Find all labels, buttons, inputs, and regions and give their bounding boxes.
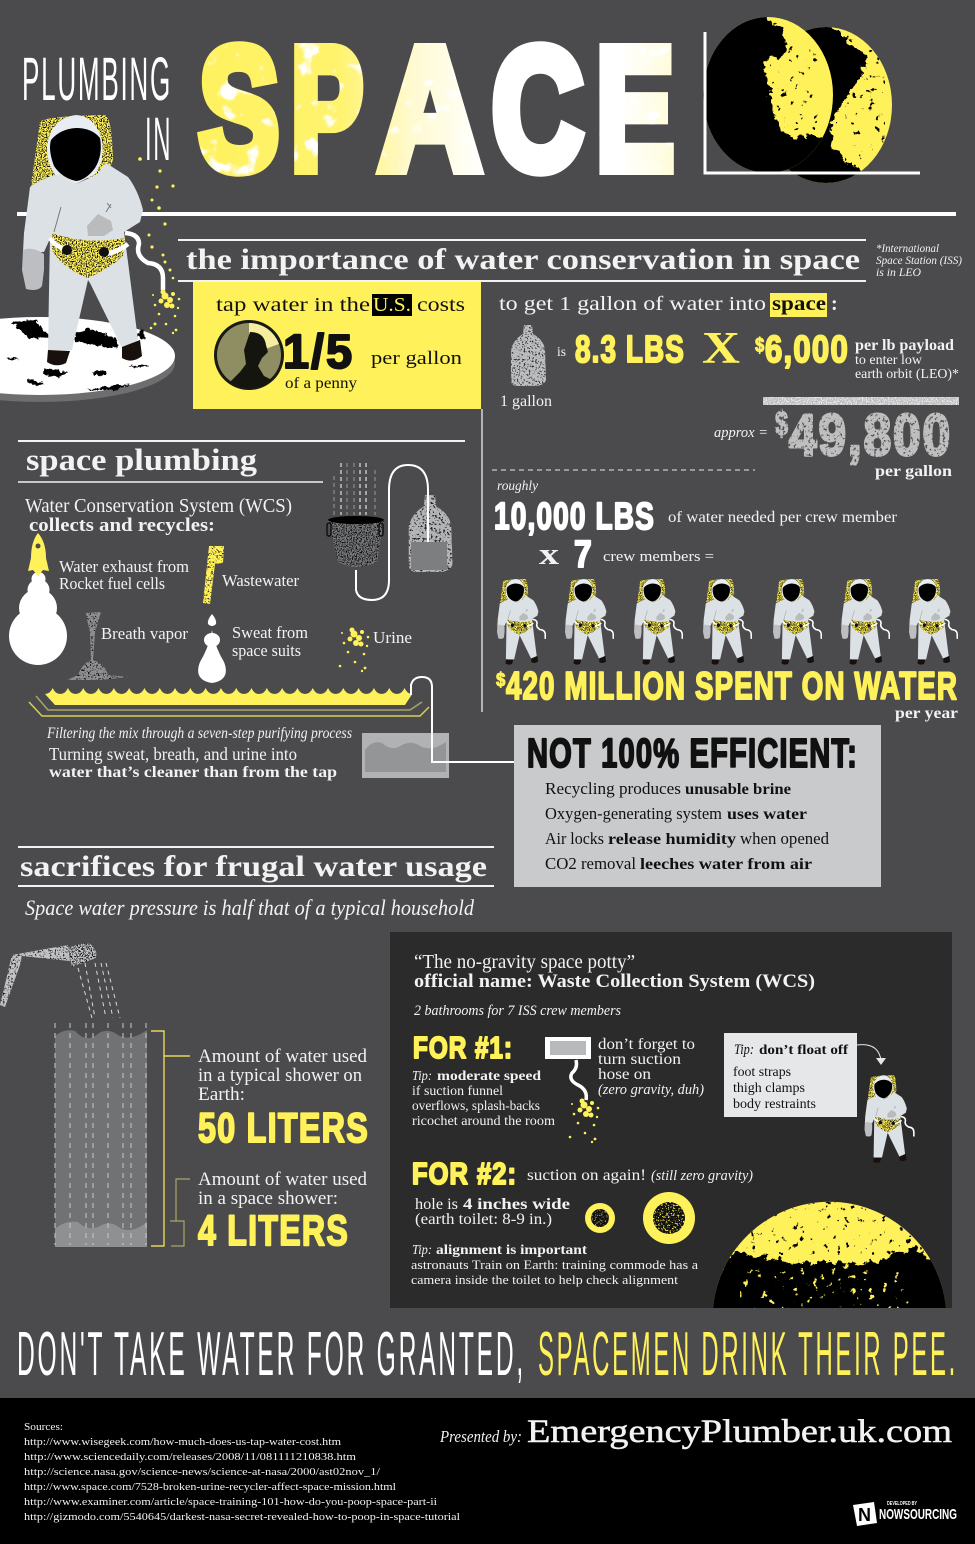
callout: don't float off: body restraints <box>733 1096 816 1111</box>
text: water pressure: Space water pressure is half that of a typical household <box>25 895 475 920</box>
text: turn suction on <box>598 1036 704 1098</box>
text: hole size: (earth toilet: 8-9 in.) <box>415 1211 552 1228</box>
icon: gallon jug <box>511 325 546 386</box>
text: alignment tip <box>411 1242 698 1287</box>
title: space: E <box>596 12 674 206</box>
label: sweat from space suits: space suits <box>232 641 301 660</box>
bracket: 4 liters <box>170 1179 190 1246</box>
icon: suction hose <box>545 1037 599 1143</box>
heading: 1 gallon into space: to get 1 gallon of water into <box>499 293 766 315</box>
text: cleaner than tap <box>49 744 337 781</box>
label: sweat from space suits <box>232 623 308 660</box>
icon: bucket and hose to jug <box>327 463 452 600</box>
sources list: http://science.nasa.gov/science-news/science-at-nasa/2000/ast02nov_1/ <box>24 1466 381 1478</box>
label: filtering process: Filtering the mix through a seven-step purifying process <box>46 725 352 742</box>
panel: not 100% efficient: Air locks <box>545 829 604 848</box>
panel: tap water cost: tap water in the <box>216 294 370 316</box>
text: WCS intro: Water Conservation System (WCS) <box>25 495 292 517</box>
footer panel <box>0 1398 975 1544</box>
text: potty title <box>414 952 815 1019</box>
text: hole size: hole is <box>415 1196 458 1213</box>
panel: tap water cost: U.S. <box>373 294 411 316</box>
icon: small hole <box>585 1203 615 1233</box>
text: potty title: 2 bathrooms for 7 ISS crew members <box>414 1003 621 1019</box>
multiply sign: X <box>702 323 740 373</box>
text: water needed: of water needed per crew member <box>668 509 898 526</box>
text: is: is <box>557 345 566 360</box>
icon: shower head <box>0 944 120 1018</box>
text: alignment tip: Tip: <box>412 1243 432 1258</box>
footnote: ISS: Space Station (ISS) <box>876 253 962 267</box>
heading: 1 gallon into space: : <box>831 293 838 315</box>
panel: tap water cost: 1/5 <box>283 326 354 379</box>
icon: sweat drops <box>198 614 226 683</box>
text: turn suction on: turn suction <box>598 1051 681 1068</box>
heading: sacrifices: sacrifices for frugal water usage <box>20 850 487 883</box>
heading: space plumbing: space plumbing <box>26 442 258 477</box>
text: IN <box>145 105 172 173</box>
stat: 50 liters: 50 LITERS <box>198 1104 369 1151</box>
footnote: ISS: *International <box>876 241 940 255</box>
callout: don't float off: don’t float off <box>759 1043 848 1058</box>
divider: dashed <box>492 469 755 471</box>
icon: urine drops <box>339 628 369 672</box>
stat: 6000 dollars: 6,000 <box>765 329 849 371</box>
panel: tap water cost <box>193 282 481 409</box>
text: alignment tip: camera inside the toilet to help check alignment <box>411 1272 678 1287</box>
text: suction on again: suction on again! <box>527 1167 646 1184</box>
logo: nowsourcing <box>853 1501 957 1526</box>
panel: space potty <box>390 932 960 1330</box>
divider: main rule <box>17 212 956 216</box>
sources list <box>24 1421 460 1523</box>
text: approx: approx = <box>714 425 768 441</box>
icon: wastewater <box>203 546 224 604</box>
label: sweat from space suits: Sweat from <box>232 623 308 642</box>
text: suction on again: (still zero gravity) <box>651 1168 753 1184</box>
divider: vertical column rule <box>481 409 483 712</box>
logo: nowsourcing: N <box>858 1505 871 1525</box>
text: per lb payload <box>855 337 959 382</box>
sources list: http://www.sciencedaily.com/releases/2008/11/081111210838.htm <box>24 1451 357 1463</box>
text: typical shower: Amount of water used <box>198 1046 367 1067</box>
text: space shower <box>198 1169 367 1209</box>
label: rocket fuel cells: Rocket fuel cells <box>59 574 165 593</box>
text: hole size <box>415 1196 570 1228</box>
arrow: to astronaut <box>857 1045 886 1065</box>
astronaut row: seven crew <box>497 579 957 665</box>
chart: water tank comparison <box>55 1023 147 1247</box>
panel: tap water cost: of a penny <box>285 375 357 392</box>
moon ground platform <box>0 317 175 402</box>
astronaut: strapped in <box>864 1075 914 1163</box>
text: per lb payload: to enter low <box>855 353 923 368</box>
icon: clean water tank and outflow <box>362 677 514 778</box>
text: tip moderate speed: if suction funnel <box>412 1083 503 1098</box>
presented by: Presented by: <box>439 1427 522 1446</box>
icon: penny <box>214 320 284 390</box>
text: suction on again <box>527 1167 753 1184</box>
text: turn suction on: hose on <box>598 1066 651 1083</box>
title: space: C <box>492 12 583 206</box>
text: turn suction on: don’t forget to <box>598 1036 695 1053</box>
text: cleaner than tap: water that’s cleaner than from the tap <box>49 764 337 781</box>
astronaut: main figure <box>22 115 163 365</box>
text: tip moderate speed: ricochet around the room <box>412 1113 556 1128</box>
text: per lb payload: per lb payload <box>855 337 954 354</box>
panel: not 100% efficient: uses water <box>727 806 807 823</box>
text: tip moderate speed: Tip: <box>412 1069 432 1084</box>
heading: 1 gallon into space <box>499 293 838 317</box>
icon: moon horizon <box>713 1202 946 1308</box>
title: space: P <box>291 12 363 206</box>
panel: not 100% efficient: release humidity <box>608 831 736 848</box>
heading: water conservation: the importance of water conservation in space <box>186 243 860 276</box>
text: typical shower: in a typical shower on <box>198 1065 362 1086</box>
label: rocket fuel cells: Water exhaust from <box>59 557 189 576</box>
text: hole size: 4 inches wide <box>463 1196 570 1213</box>
bracket: 50 liters <box>151 1031 190 1246</box>
stat: 10,000 lbs: 10,000 LBS <box>494 496 655 538</box>
text: potty title: “The no-gravity space potty” <box>414 952 635 973</box>
panel: not 100% efficient: Recycling produces <box>545 779 681 798</box>
text: per lb payload: earth orbit (LEO)* <box>855 367 959 382</box>
text: turn suction on: (zero gravity, duh) <box>598 1082 704 1098</box>
text: roughly: roughly <box>497 479 539 494</box>
sources list: http://www.examiner.com/article/space-training-101-how-do-you-poop-space-part-ii <box>24 1496 437 1508</box>
label: urine: Urine <box>373 628 412 647</box>
text: WCS intro: collects and recycles: <box>29 516 215 536</box>
panel: not 100% efficient: leeches water from air <box>640 856 812 873</box>
text: alignment tip: astronauts Train on Earth: training commode has a <box>411 1257 698 1272</box>
stat: 4 liters: 4 LITERS <box>198 1207 349 1255</box>
stat: 420 million: $ <box>496 670 506 691</box>
stat: 6000 dollars: $ <box>755 335 765 357</box>
sources list: http://www.wisegeek.com/how-much-does-us-tap-water-cost.htm <box>24 1436 341 1448</box>
text: tip moderate speed: moderate speed <box>437 1068 542 1083</box>
presented by: EmergencyPlumber.uk.com <box>527 1414 952 1450</box>
label: wastewater: Wastewater <box>222 571 300 590</box>
result bar <box>763 397 959 405</box>
label: breath vapor: Breath vapor <box>101 624 188 643</box>
text: per gallon: per gallon <box>875 463 952 480</box>
sources list: http://gizmodo.com/5540645/darkest-nasa-secret-revealed-how-to-poop-in-space-tutorial <box>24 1511 460 1523</box>
stat: times seven crew <box>539 534 714 576</box>
label: 1 gallon: 1 gallon <box>500 393 552 410</box>
footnote: ISS <box>876 241 962 279</box>
panel: tap water cost: per gallon <box>371 348 463 369</box>
panel: not 100% efficient: unusable brine <box>685 781 791 798</box>
moons behind letter frame <box>703 17 920 183</box>
text: tip moderate speed <box>412 1068 556 1128</box>
text: potty title: official name: Waste Collection System (WCS) <box>414 971 815 992</box>
callout: don't float off: Tip: <box>734 1042 754 1058</box>
panel: not 100% efficient: CO2 removal <box>545 854 636 873</box>
sources list: Sources: <box>24 1421 63 1433</box>
icon: big hole <box>643 1192 695 1244</box>
stat: 8.3 lbs: 8.3 LBS <box>575 329 685 371</box>
text: typical shower: Earth: <box>198 1084 245 1105</box>
label: rocket fuel cells <box>59 557 189 593</box>
title: plumbing in <box>22 45 172 173</box>
panel: not 100% efficient: when opened <box>740 829 829 848</box>
stat: 49,800 dollars: 49,800 <box>789 403 952 468</box>
stat: times seven crew: 7 <box>574 534 593 576</box>
panel: not 100% efficient <box>514 725 881 887</box>
heading: for #1: FOR #1: <box>413 1030 513 1065</box>
text: typical shower <box>198 1046 367 1105</box>
stat: times seven crew: crew members = <box>603 549 714 565</box>
panel: not 100% efficient: Oxygen-generating system <box>545 804 722 823</box>
callout: don't float off <box>724 1033 857 1117</box>
stat: 49,800 dollars: $ <box>775 405 789 443</box>
icon: breath vapor <box>67 612 128 680</box>
title: space: S <box>199 12 279 206</box>
icon: droplets from astronaut hose <box>138 157 180 334</box>
heading: 1 gallon into space: space <box>772 293 826 315</box>
text: tip moderate speed: overflows, splash-backs <box>412 1098 540 1113</box>
text: space shower: in a space shower: <box>198 1188 338 1209</box>
footnote: ISS: is in LEO <box>876 265 921 279</box>
text: per year: per year <box>895 705 958 722</box>
icon: filter tray <box>29 688 429 716</box>
panel: tap water cost: costs <box>417 294 465 316</box>
logo: nowsourcing: DEVELOPED BY <box>887 1501 917 1507</box>
icon: rocket with exhaust <box>9 533 67 665</box>
callout: don't float off: thigh clamps <box>733 1080 805 1095</box>
title: space <box>199 12 674 206</box>
heading: for #2: FOR #2: <box>412 1156 517 1191</box>
sources list: http://www.space.com/7528-broken-urine-recycler-affect-space-mission.html <box>24 1481 396 1493</box>
text: space shower: Amount of water used <box>198 1169 367 1190</box>
title: space: A <box>379 12 481 206</box>
callout: don't float off: foot straps <box>733 1064 791 1079</box>
text: cleaner than tap: Turning sweat, breath, and urine into <box>49 744 297 764</box>
text: WCS intro <box>25 495 292 536</box>
text: alignment tip: alignment is important <box>436 1242 588 1257</box>
stat: times seven crew: x <box>539 536 560 571</box>
text: PLUMBING <box>22 45 172 113</box>
